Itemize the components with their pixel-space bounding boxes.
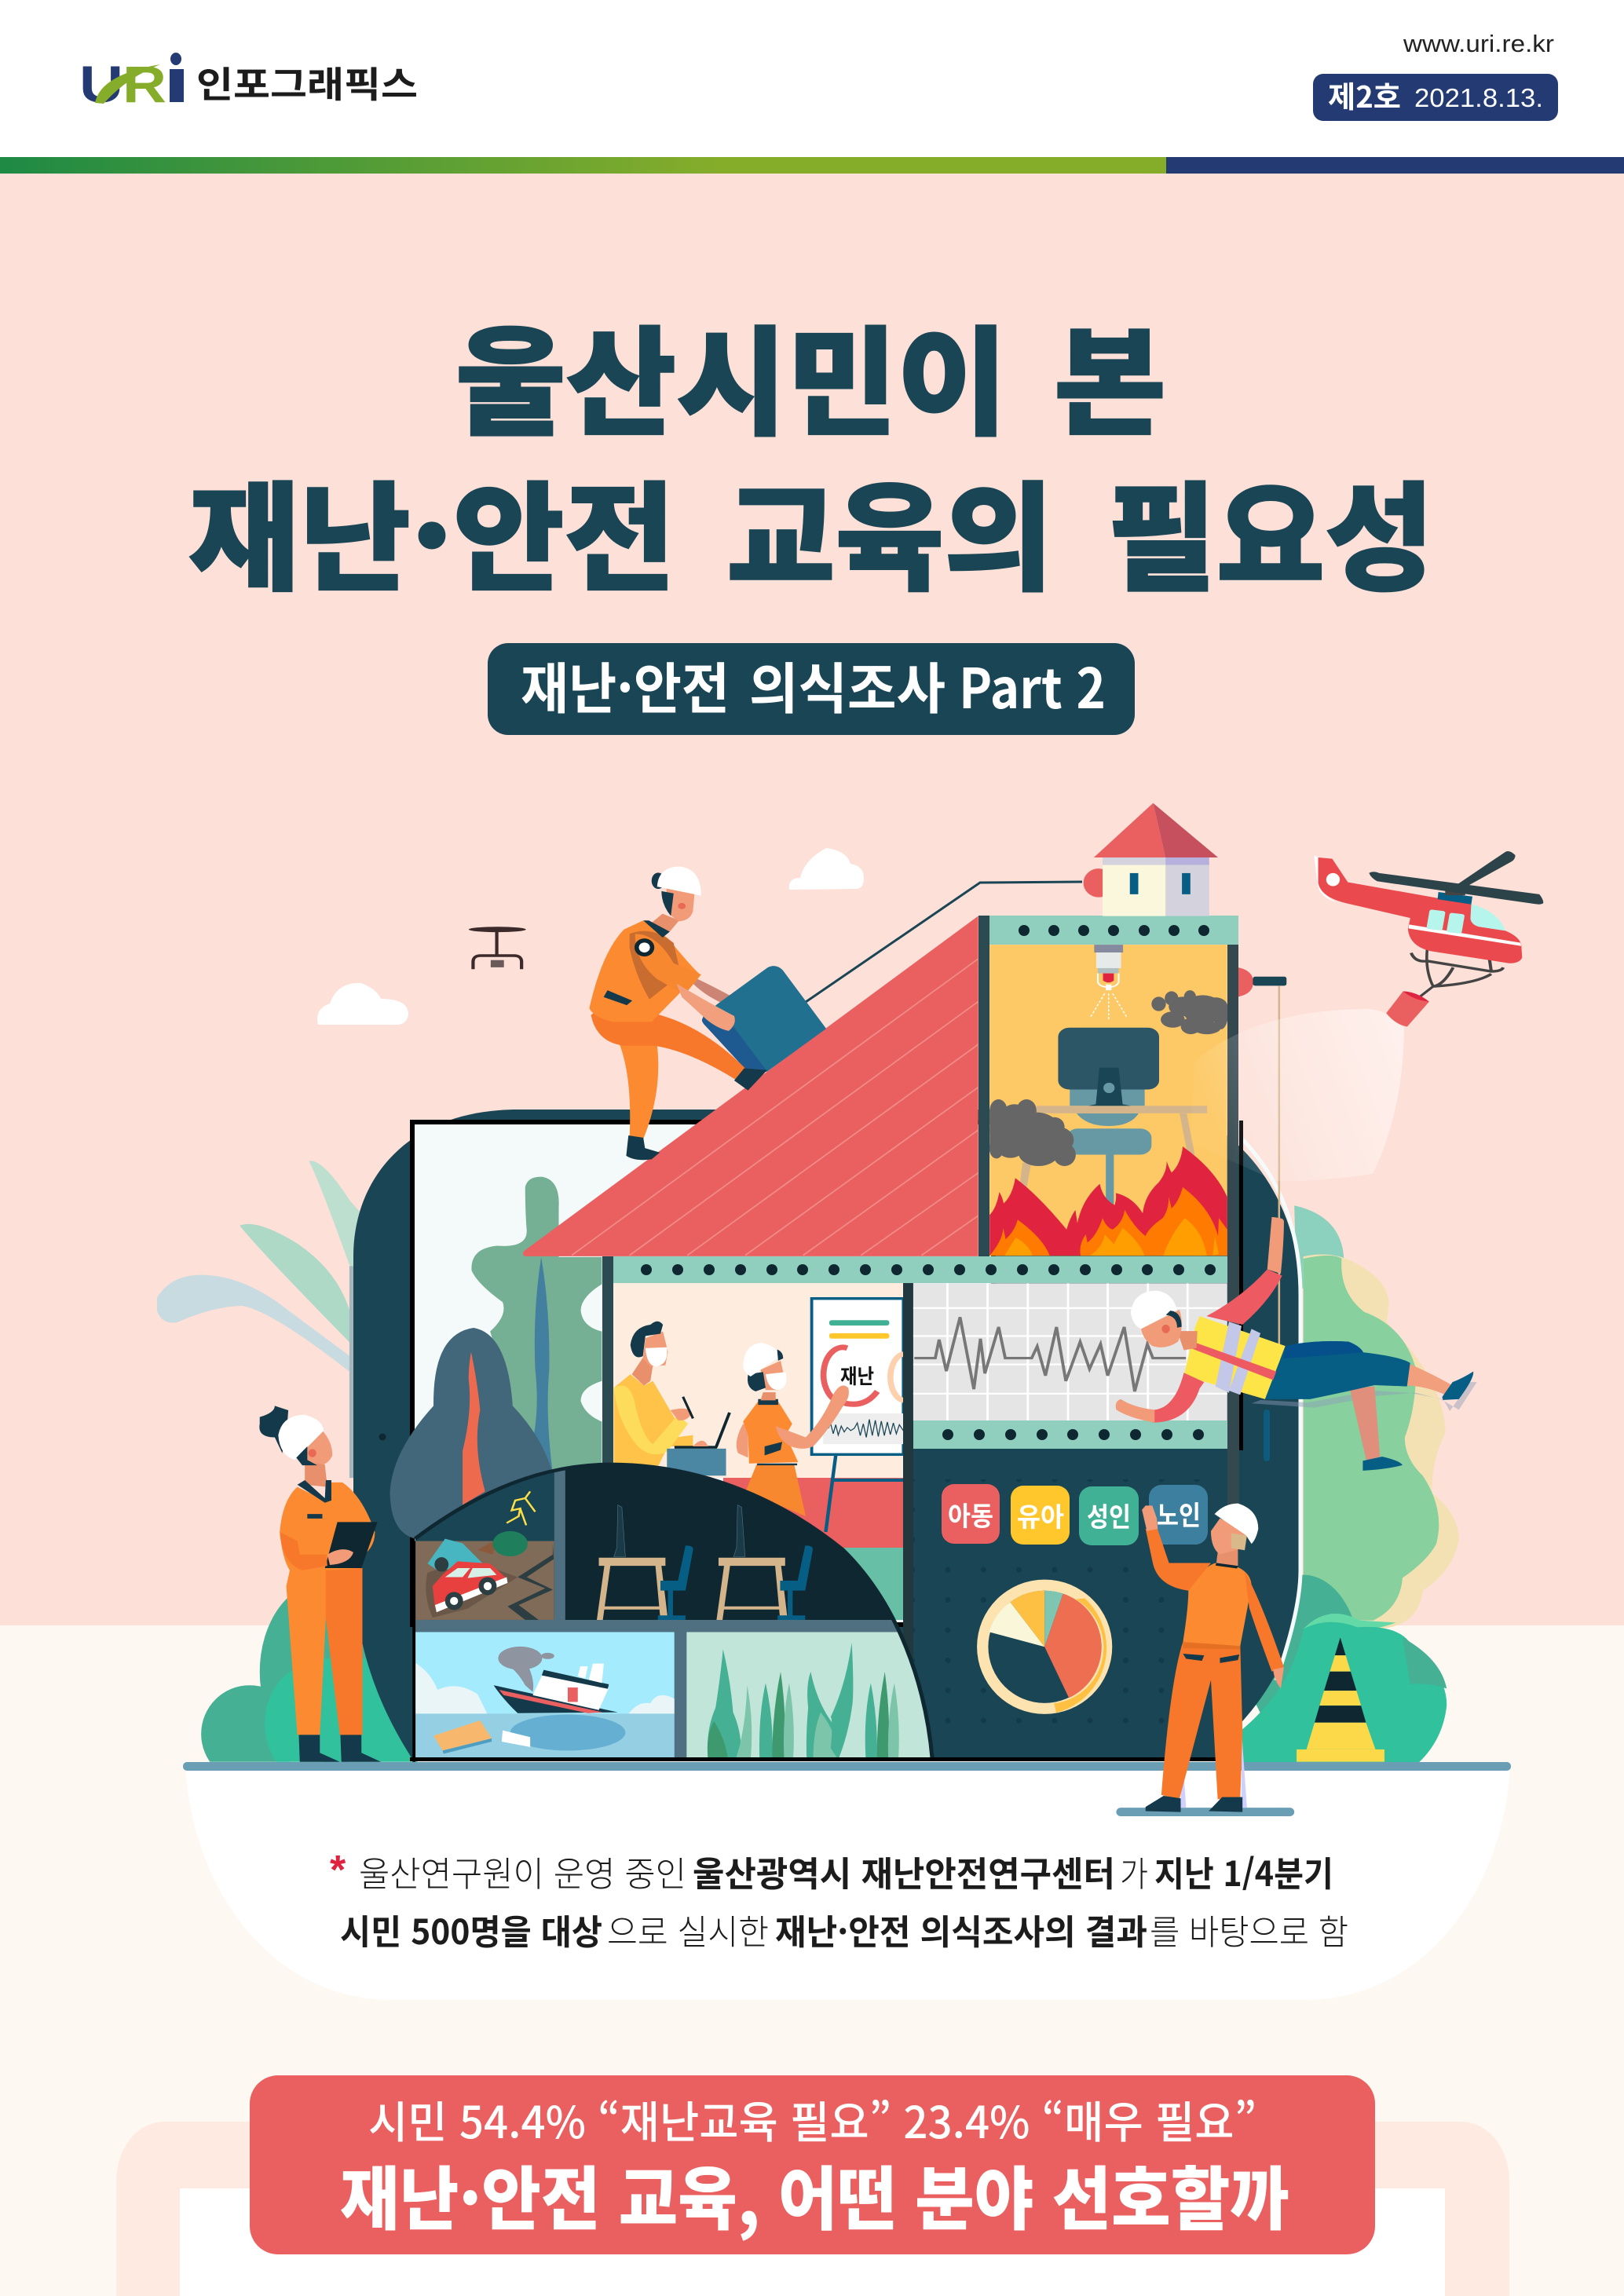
title: 교육의 [726,444,1053,615]
subtitle pill [488,643,1135,735]
header: issue badge [1313,73,1558,121]
solar panel [702,966,826,1075]
small house on the tower [1084,803,1218,916]
illustration: safety house scene [157,803,1543,1816]
age group buttons [942,1484,1208,1545]
title: 울산시민이 [455,289,1008,459]
survey note: 지난 1/4분기 [1154,1846,1333,1896]
office room [602,1256,903,1620]
red heading banner: 시민 54.4% “재난교육 필요” 23.4% “매우 필요” [368,2088,1256,2152]
survey note: 재난·안전 의식조사의 결과 [775,1904,1147,1954]
button: 성인: 성인 [1087,1496,1131,1534]
ground line [183,1762,1511,1771]
seaweed scene [686,1632,937,1760]
title: 필요성 [1107,444,1434,615]
header: logo: U [79,55,123,113]
subtitle pill: 재난·안전 [521,645,730,725]
header: logo: 인포그래픽스 [196,57,418,108]
landscape: plant, river, volcano [390,1177,602,1539]
rope hanger on the tower [1238,967,1286,1363]
control panel [903,1121,1270,1759]
bushes on the right [1240,1205,1459,1763]
header colour bar [0,157,1624,174]
survey note: 를 바탕으로 함 [1150,1904,1348,1954]
plant leaves on the left [157,1161,360,1478]
survey note: 가 [1120,1846,1148,1896]
sprinkler [1091,945,1127,1019]
survey note: 시민 500명을 대상 [340,1904,602,1954]
header: issue badge: 2021.8.13. [1414,83,1543,112]
white bowl behind note [185,1767,1510,2000]
figure: worker on roof carrying panel [589,866,826,1160]
red heading banner: 재난·안전 교육, 어떤 분야 선호할까 [340,2144,1289,2244]
traffic cone [1297,1637,1384,1762]
icon: drone [469,927,526,969]
figure: worker pressing buttons [1116,1504,1294,1816]
top room: fire [989,945,1228,1256]
button: 아동: 아동 [948,1495,993,1534]
smoke left [989,1099,1076,1166]
structural bands with rivets [613,916,1238,1449]
title [188,289,1434,615]
smoke right [1151,990,1228,1034]
woman at board [737,1343,849,1516]
screen bottom edge [410,1757,1219,1761]
header: website: www.uri.re.kr [1403,30,1554,57]
figure: rappelling worker [1116,1217,1477,1471]
subtitle pill: Part 2 [959,645,1106,725]
survey note [330,1846,1348,1954]
phone body [353,1110,1300,1759]
screen left window [412,1122,993,1625]
man at laptop [614,1322,730,1475]
dome dividers [554,1464,565,1620]
figure: woman with clipboard [259,1406,381,1762]
dome room [412,1464,937,1762]
wire from roof panel to house [806,882,1082,1002]
red heading banner [250,2075,1375,2254]
button: 성인 [1079,1486,1139,1545]
earthquake ground [415,1531,554,1620]
title: 재난·안전 [188,444,675,615]
water beam from helicopter [1191,1009,1404,1181]
button: 유아: 유아 [1017,1496,1064,1534]
button: 노인 [1149,1485,1208,1545]
ship scene [415,1632,675,1760]
header: logo [79,53,418,113]
header: logo: R [123,55,166,113]
icon: lightning [507,1491,536,1525]
bushes on the left [201,1598,418,1762]
button: 노인: 노인 [1157,1494,1201,1533]
seismograph room [913,1283,1227,1420]
subtitle pill: 의식조사 [749,645,946,725]
desk and monitor [1019,1028,1207,1205]
whiteboard [812,1299,903,1532]
whiteboard label: 재난 [840,1361,874,1390]
storm cell [415,1472,554,1541]
roof [523,916,978,1256]
button: 아동 [942,1484,1000,1544]
survey note: 으로 실시한 [607,1904,769,1954]
pie chart [977,1580,1112,1714]
header: issue badge: 제2호 [1328,73,1401,116]
seismograph wave [914,1317,1186,1391]
survey note: 울산연구원이 운영 중인 [359,1846,686,1896]
clouds [317,848,864,1025]
helicopter [1314,851,1543,1027]
desks [597,1505,813,1620]
survey note: * [330,1848,346,1893]
button: 유아 [1011,1486,1070,1545]
office figures [614,1322,849,1516]
title: 본 [1054,289,1166,459]
survey note: 울산광역시 재난안전연구센터 [693,1846,1115,1896]
next section panel [116,2122,1509,2296]
flames [989,1146,1227,1256]
